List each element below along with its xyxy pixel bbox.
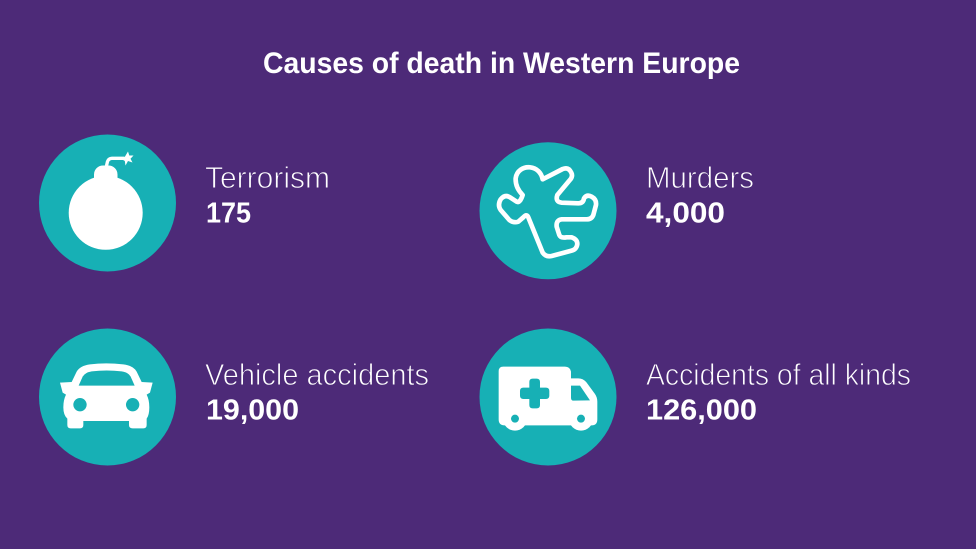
icon: bomb	[39, 134, 176, 272]
value: accidents of all kinds: 126,000	[646, 394, 757, 426]
panel: vehicle accidents	[39, 328, 429, 466]
value: vehicle accidents: 19,000	[206, 394, 299, 426]
label: terrorism: Terrorism	[205, 160, 330, 195]
label: vehicle accidents: Vehicle accidents	[205, 357, 429, 392]
label: murders: Murders	[646, 160, 754, 195]
value: murders: 4,000	[646, 198, 725, 230]
icon: car	[39, 328, 176, 466]
panel: accidents of all kinds	[480, 328, 911, 466]
label: accidents of all kinds: Accidents of all kinds	[646, 357, 911, 392]
icon: ambulance	[480, 328, 616, 466]
panel: terrorism	[39, 134, 330, 272]
value: terrorism: 175	[206, 198, 251, 230]
title: Causes of death in Western Europe	[263, 47, 740, 80]
panel: murders	[480, 142, 754, 279]
icon: body outline	[480, 142, 616, 279]
